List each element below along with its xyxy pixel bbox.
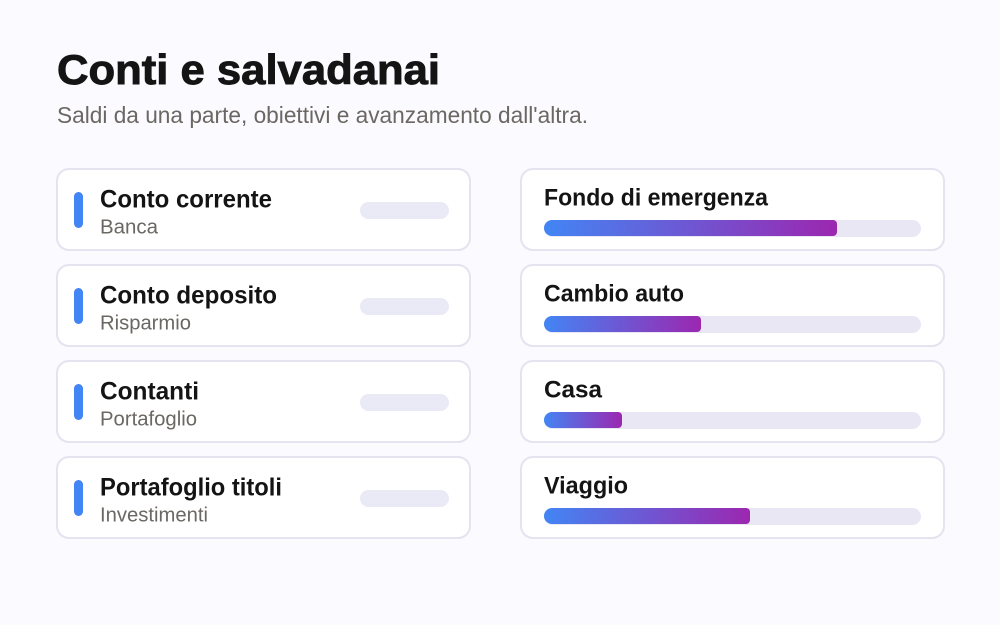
panel: cambio auto: Cambio auto: [544, 280, 684, 308]
panel: portafoglio titoli: Investimenti: [100, 504, 208, 526]
panel: cambio auto: [521, 265, 944, 346]
panel: conto corrente: Conto corrente: [100, 186, 272, 214]
panel: conto corrente: Banca: [100, 216, 159, 238]
panel: contanti: Contanti: [100, 378, 199, 406]
panel: conto deposito: Risparmio: [100, 312, 191, 334]
panel: casa: [521, 361, 944, 442]
panel: portafoglio titoli: [57, 457, 470, 538]
panel: conto corrente: [57, 169, 470, 250]
panel: fondo di emergenza: Fondo di emergenza: [544, 184, 769, 212]
panel: contanti: [57, 361, 470, 442]
panel: fondo di emergenza: [521, 169, 944, 250]
panel: viaggio: Viaggio: [544, 472, 628, 500]
panel: portafoglio titoli: Portafoglio titoli: [100, 474, 282, 502]
panel: viaggio: [521, 457, 944, 538]
panel: casa: Casa: [544, 376, 603, 404]
panel: conto deposito: [57, 265, 470, 346]
panel: contanti: Portafoglio: [100, 408, 197, 430]
subtitle: Saldi da una parte, obiettivi e avanzamento dall'altra.: [57, 102, 588, 128]
title: Conti e salvadanai: [57, 46, 440, 93]
panel: conto deposito: Conto deposito: [100, 282, 277, 310]
